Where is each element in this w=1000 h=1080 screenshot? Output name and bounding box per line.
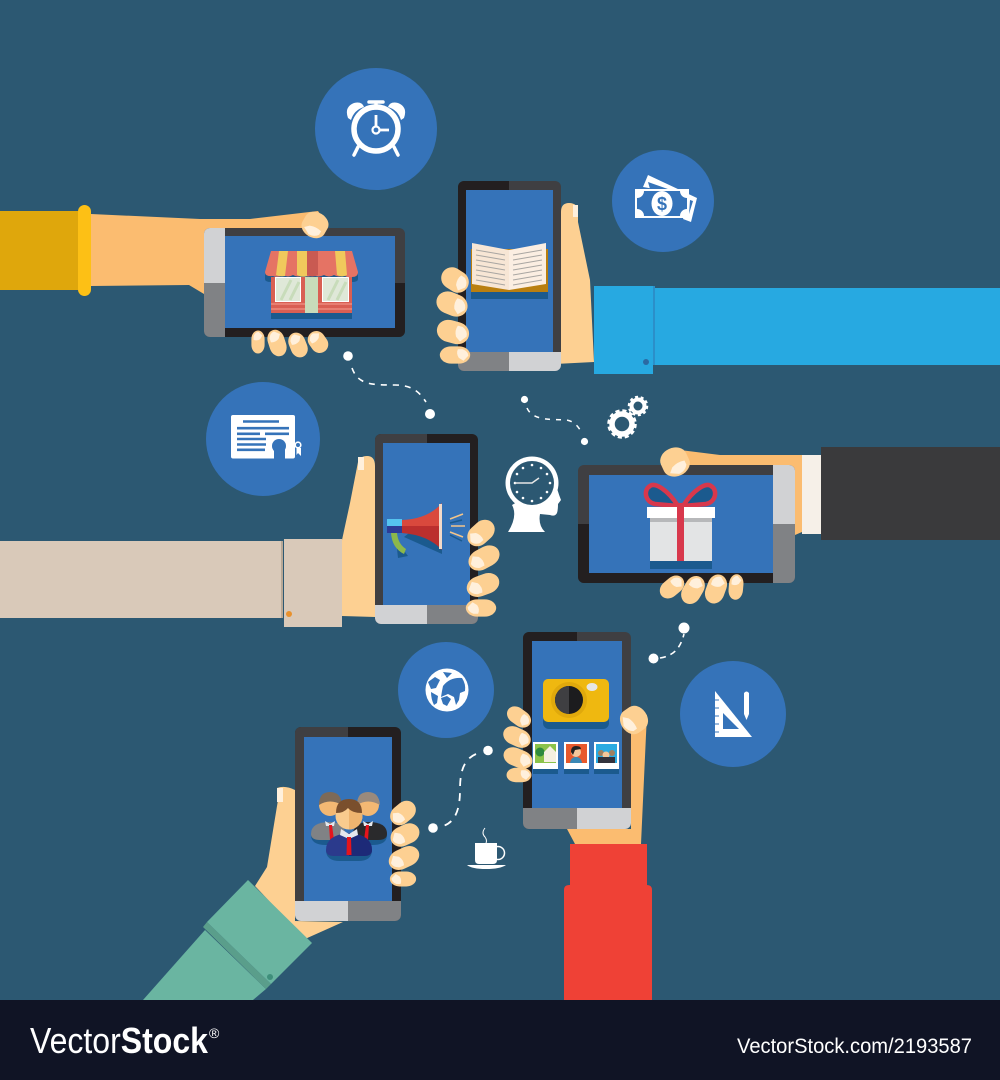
fingers <box>251 208 332 360</box>
connector: dashed line 3 <box>648 622 690 664</box>
phone: landscape gift <box>578 465 795 583</box>
phone: portrait book <box>458 181 561 371</box>
icon: gears <box>609 397 647 437</box>
fingers <box>433 263 473 364</box>
icon: head with clock <box>506 456 561 532</box>
icon: photo thumbnails <box>533 742 619 774</box>
phone: landscape store <box>204 228 405 337</box>
arm with phone: red sleeve, camera app <box>500 632 653 1000</box>
footer bar: VectorStock.com/2193587 <box>737 1035 972 1058</box>
phone: portrait people <box>295 727 401 921</box>
circle icon: certificate card <box>206 382 320 496</box>
connector: dashed line 2 <box>521 396 588 445</box>
icon: gift box <box>646 485 715 569</box>
circle icon: globe <box>398 642 494 738</box>
icon: store <box>265 251 358 319</box>
footer bar <box>0 1000 1000 1080</box>
arm with phone: beige sleeve, megaphone app <box>0 434 503 627</box>
phone: portrait camera <box>523 632 631 829</box>
footer bar: ® <box>209 1025 220 1041</box>
arm with phone: yellow sleeve, store app <box>0 205 405 360</box>
fingers <box>500 701 653 782</box>
connector: dashed line 4 <box>428 746 493 833</box>
icon: coffee cup <box>467 828 506 869</box>
arm with phone: blue sleeve, book app <box>433 181 1000 374</box>
phone: portrait megaphone <box>375 434 478 624</box>
arm with phone: dark suit sleeve, gift app <box>578 443 1000 608</box>
circle icon: money <box>612 150 714 252</box>
arm with phone: green sleeve, people app <box>143 727 423 1000</box>
fingers <box>463 515 503 617</box>
logo text: VectorStock <box>30 1020 209 1061</box>
icon: camera <box>543 679 609 729</box>
icon: three people <box>311 792 387 861</box>
icon: open book <box>471 243 548 299</box>
circle icon: ruler and pencil <box>680 661 786 767</box>
connector: dashed line 1 <box>343 351 435 419</box>
circle icon: money: $ <box>657 194 667 214</box>
fingers <box>656 443 744 608</box>
circle icon: alarm clock <box>315 68 437 190</box>
icon: megaphone <box>387 503 465 558</box>
fingers <box>385 797 423 886</box>
